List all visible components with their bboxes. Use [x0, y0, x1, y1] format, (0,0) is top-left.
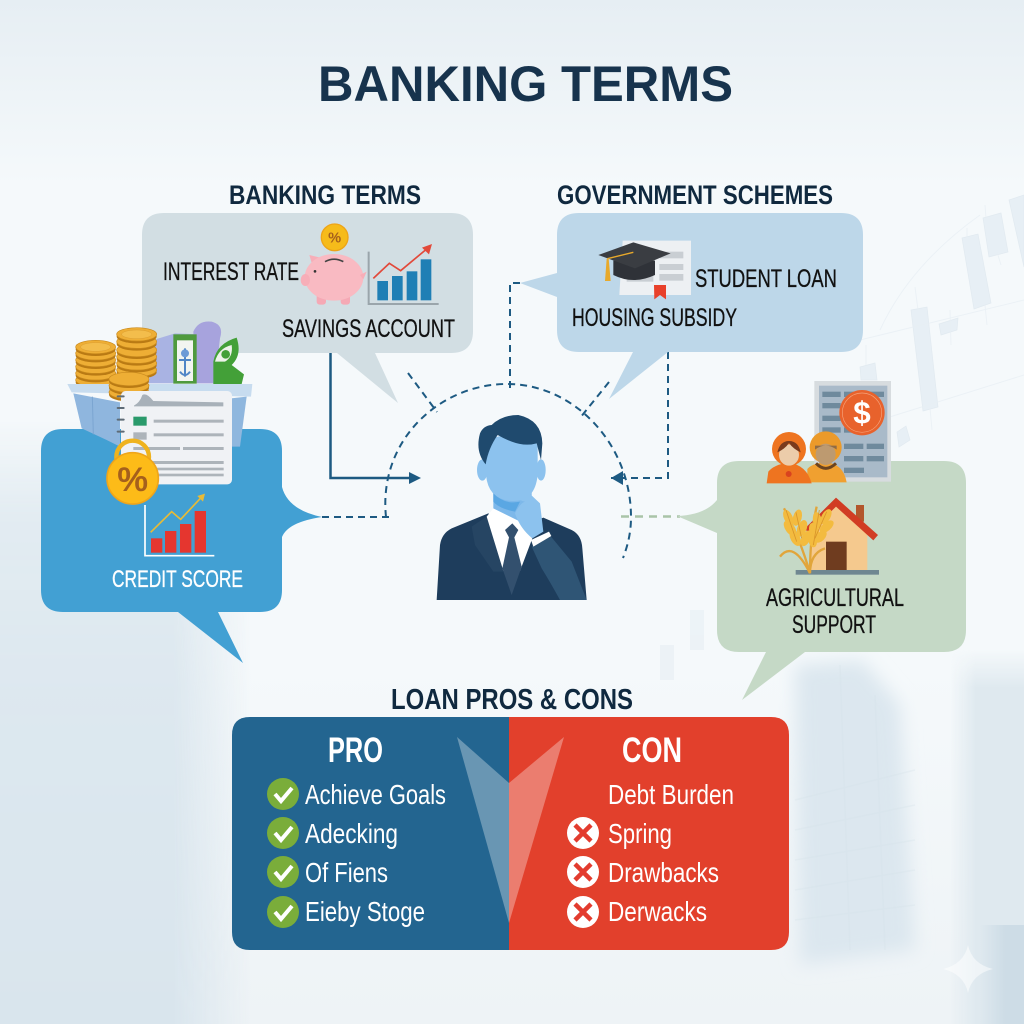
panel: banking terms speech bubble — [142, 213, 473, 403]
label: agricultural support — [766, 584, 904, 639]
panel: credit score speech bubble — [41, 321, 322, 663]
list: pro items: Eieby Stoge — [305, 896, 425, 927]
connector: green dashed line — [621, 515, 680, 518]
panel: agricultural support speech bubble — [677, 381, 966, 700]
label: credit score: CREDIT SCORE — [112, 566, 243, 593]
panel: con side — [509, 717, 789, 950]
label: agricultural support: SUPPORT — [792, 611, 876, 639]
title: BANKING TERMS — [318, 56, 733, 112]
icon: basket of coins and cash — [67, 321, 252, 447]
icon: farmer couple — [767, 431, 847, 483]
list: pro items: Achieve Goals — [305, 779, 446, 810]
list: con items — [567, 779, 734, 928]
icon: sparkle watermark — [943, 945, 993, 993]
icon: credit bar chart — [145, 494, 214, 556]
list: con items: Debt Burden — [608, 779, 734, 810]
heading: loan pros and cons: LOAN PROS & CONS — [391, 684, 633, 716]
heading: banking terms: BANKING TERMS — [229, 180, 421, 210]
icon: growth bar chart — [369, 244, 439, 304]
list: con items: Spring — [608, 818, 672, 849]
panel: pro side — [232, 717, 509, 950]
connector: dashed arc around person — [322, 283, 668, 558]
label: student loan: STUDENT LOAN — [695, 265, 837, 293]
panel: loan pros and cons — [232, 717, 789, 950]
icon: piggy bank with coin — [301, 224, 367, 305]
label: savings account: SAVINGS ACCOUNT — [282, 315, 455, 343]
icon: bank document with dollar badge — [814, 381, 891, 482]
connector: solid line from banking terms to person — [330, 353, 421, 484]
center chevron — [457, 737, 564, 923]
icon: piggy bank with coin: % — [328, 231, 341, 247]
heading: pro: PRO — [328, 731, 383, 770]
heading: government schemes: GOVERNMENT SCHEMES — [557, 180, 833, 210]
panel: government schemes speech bubble — [520, 213, 863, 399]
icon: thinking businessman — [437, 415, 587, 600]
icon: percent padlock: % — [117, 461, 148, 499]
list: pro items: Of Fiens — [305, 857, 388, 888]
label: agricultural support: AGRICULTURAL — [766, 584, 904, 612]
label: housing subsidy: HOUSING SUBSIDY — [572, 304, 737, 332]
icon: farmhouse and wheat — [780, 498, 879, 575]
list: con items: Derwacks — [608, 896, 707, 927]
icon: percent padlock — [107, 441, 158, 504]
heading: con: CON — [622, 731, 682, 770]
icon: graduation cap and certificate — [598, 241, 691, 299]
list: pro items: Adecking — [305, 818, 398, 849]
list: pro items — [267, 778, 446, 928]
label: interest rate: INTEREST RATE — [163, 258, 299, 286]
list: con items: Drawbacks — [608, 857, 719, 888]
icon: document checklist — [117, 391, 232, 484]
icon: bank document with dollar badge: $ — [853, 396, 871, 431]
